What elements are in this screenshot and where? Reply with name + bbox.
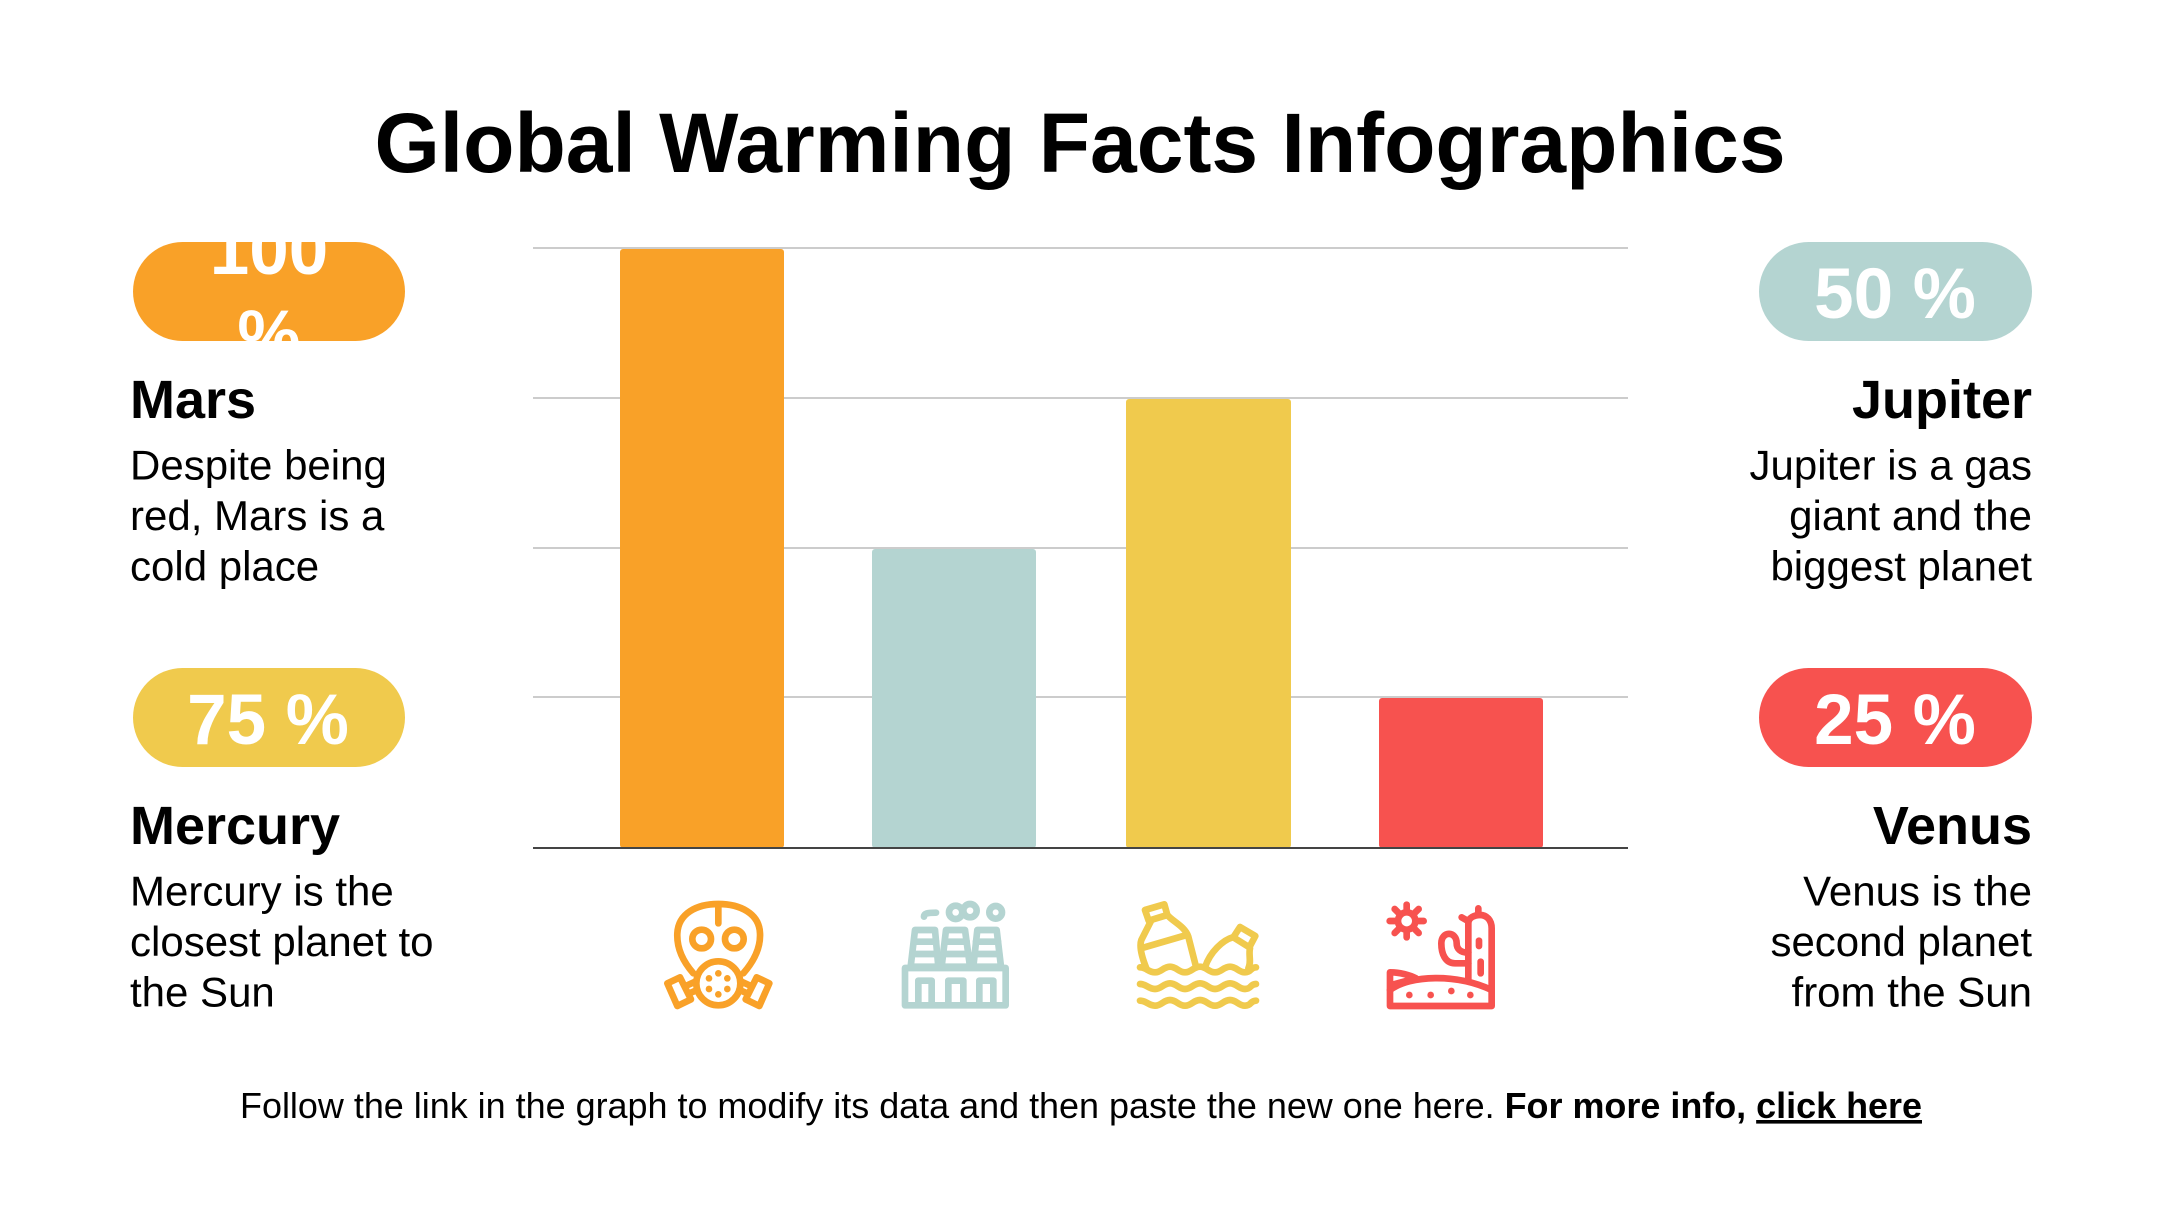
- bar: Mercury: [1126, 399, 1291, 848]
- text: Venus description: from the Sun: [1792, 968, 2032, 1016]
- text: Mars description: cold place: [130, 542, 319, 590]
- text: Venus description: Venus is the: [1803, 868, 2032, 914]
- badge: Venus 25 %: [1759, 668, 2032, 767]
- text: Mercury description: the Sun: [130, 968, 275, 1016]
- heading: Jupiter: Jupiter: [1852, 370, 2032, 430]
- icon: desert cactus and sun: [1390, 905, 1492, 1006]
- title: Global Warming Facts Infographics: [374, 96, 1786, 190]
- text: Jupiter description: biggest planet: [1770, 542, 2032, 590]
- panel: Mercury: [130, 668, 434, 1016]
- icon: gas mask: [667, 904, 769, 1006]
- text: Mercury description: Mercury is the: [130, 868, 394, 914]
- bar chart: [533, 248, 1628, 848]
- text: Jupiter description: giant and the: [1789, 492, 2032, 539]
- heading: Venus: Venus: [1873, 796, 2032, 856]
- badge: Mars 100 %: [133, 242, 405, 341]
- heading: Mercury: Mercury: [130, 796, 340, 856]
- badge: Mercury 75 %: 75 %: [187, 681, 349, 760]
- panel: Mars: [130, 211, 405, 590]
- footer text: Follow the link in the graph to modify its data and then paste the new one here. For more info, click here: [240, 1085, 1922, 1126]
- panel: Venus: [1759, 668, 2032, 1016]
- text: Mars description: red, Mars is a: [130, 492, 385, 539]
- bar: Jupiter: [872, 549, 1036, 848]
- bar: Venus: [1379, 698, 1543, 848]
- icon: bottles in water: [1140, 904, 1256, 1006]
- text: Jupiter description: Jupiter is a gas: [1750, 442, 2032, 488]
- text: Mercury description: closest planet to: [130, 918, 434, 965]
- text: Mars description: Despite being: [130, 442, 387, 488]
- icon: factory: [905, 904, 1006, 1005]
- badge: Venus 25 %: 25 %: [1814, 681, 1976, 760]
- text: Venus description: second planet: [1770, 918, 2032, 965]
- heading: Mars: Mars: [130, 370, 256, 430]
- badge: Mars 100 %: %: [237, 297, 301, 376]
- panel: Jupiter: [1750, 242, 2032, 590]
- badge: Mars 100 %: 100: [210, 211, 328, 290]
- badge: Jupiter 50 %: 50 %: [1814, 255, 1976, 334]
- badge: Mercury 75 %: [133, 668, 405, 767]
- badge: Jupiter 50 %: [1759, 242, 2032, 341]
- bar: Mars: [620, 249, 784, 848]
